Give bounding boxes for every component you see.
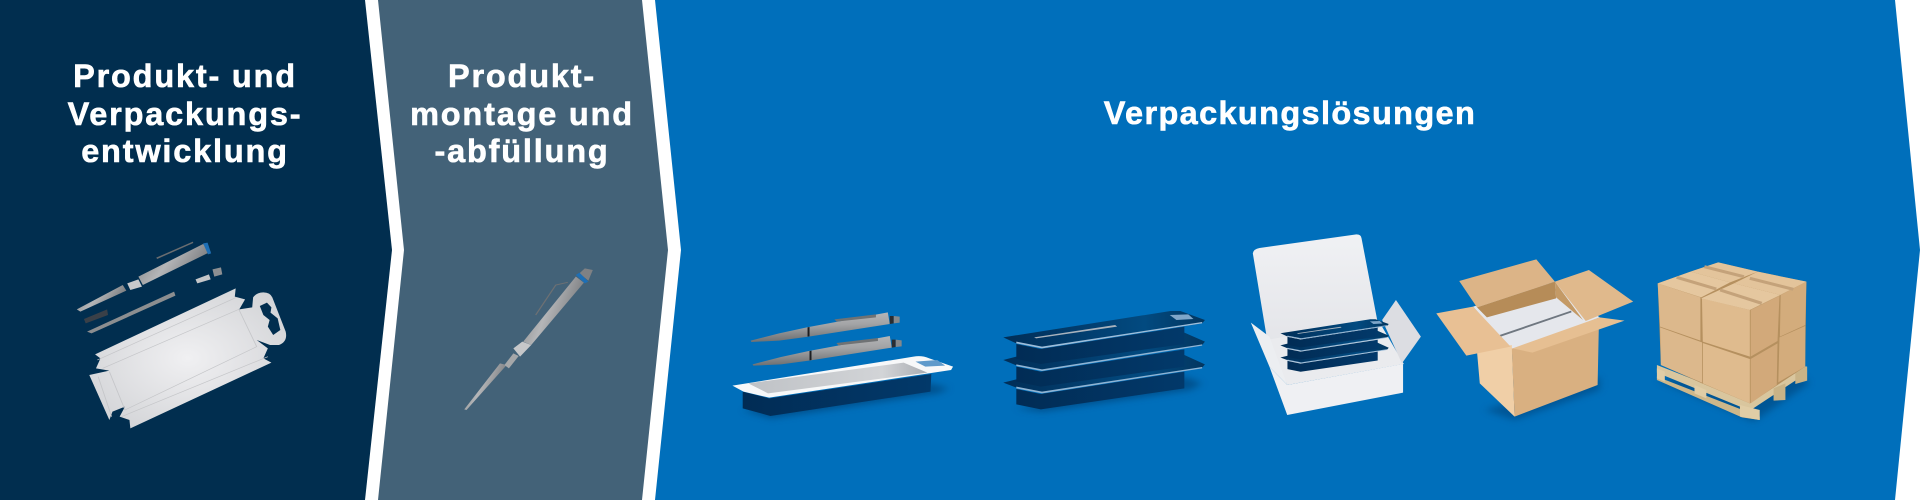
icon: stacked cartons (1658, 262, 1806, 403)
heading: Verpackungslösungen: Verpackungslösungen (1104, 95, 1476, 131)
icon: exploded pen and flat carton (77, 242, 286, 428)
panel: product and packaging development (0, 0, 392, 500)
icon: wooden pallet (1657, 365, 1807, 420)
icon: exploded pen parts (77, 242, 222, 333)
heading: Produktmontage und -abfüllung: montage und (410, 96, 634, 132)
panel: packaging solutions (655, 0, 1920, 500)
heading: Produkt- und Verpackungsentwicklung: Verpackungs- (68, 96, 302, 132)
heading: Produkt- und Verpackungsentwicklung (68, 58, 302, 169)
icon: open white folding box with trays (1251, 234, 1421, 415)
icon: stacked blister trays (1003, 311, 1205, 412)
heading: Produktmontage und -abfüllung: Produkt- (448, 58, 596, 94)
icon: boxes stacked on pallet (1657, 262, 1809, 422)
panel: product assembly and filling (378, 0, 668, 500)
icon: open cardboard box (1436, 259, 1633, 420)
heading: Produkt- und Verpackungsentwicklung: Produkt- und (73, 58, 297, 94)
icon: flat carton net (89, 288, 286, 428)
icon: two pens over blister tray (732, 312, 953, 418)
heading: Produktmontage und -abfüllung: -abfüllung (434, 133, 610, 169)
heading: Produkt- und Verpackungsentwicklung: entwicklung (81, 133, 289, 169)
heading: Produktmontage und -abfüllung (410, 58, 634, 169)
icon: assembled pen (464, 268, 593, 410)
